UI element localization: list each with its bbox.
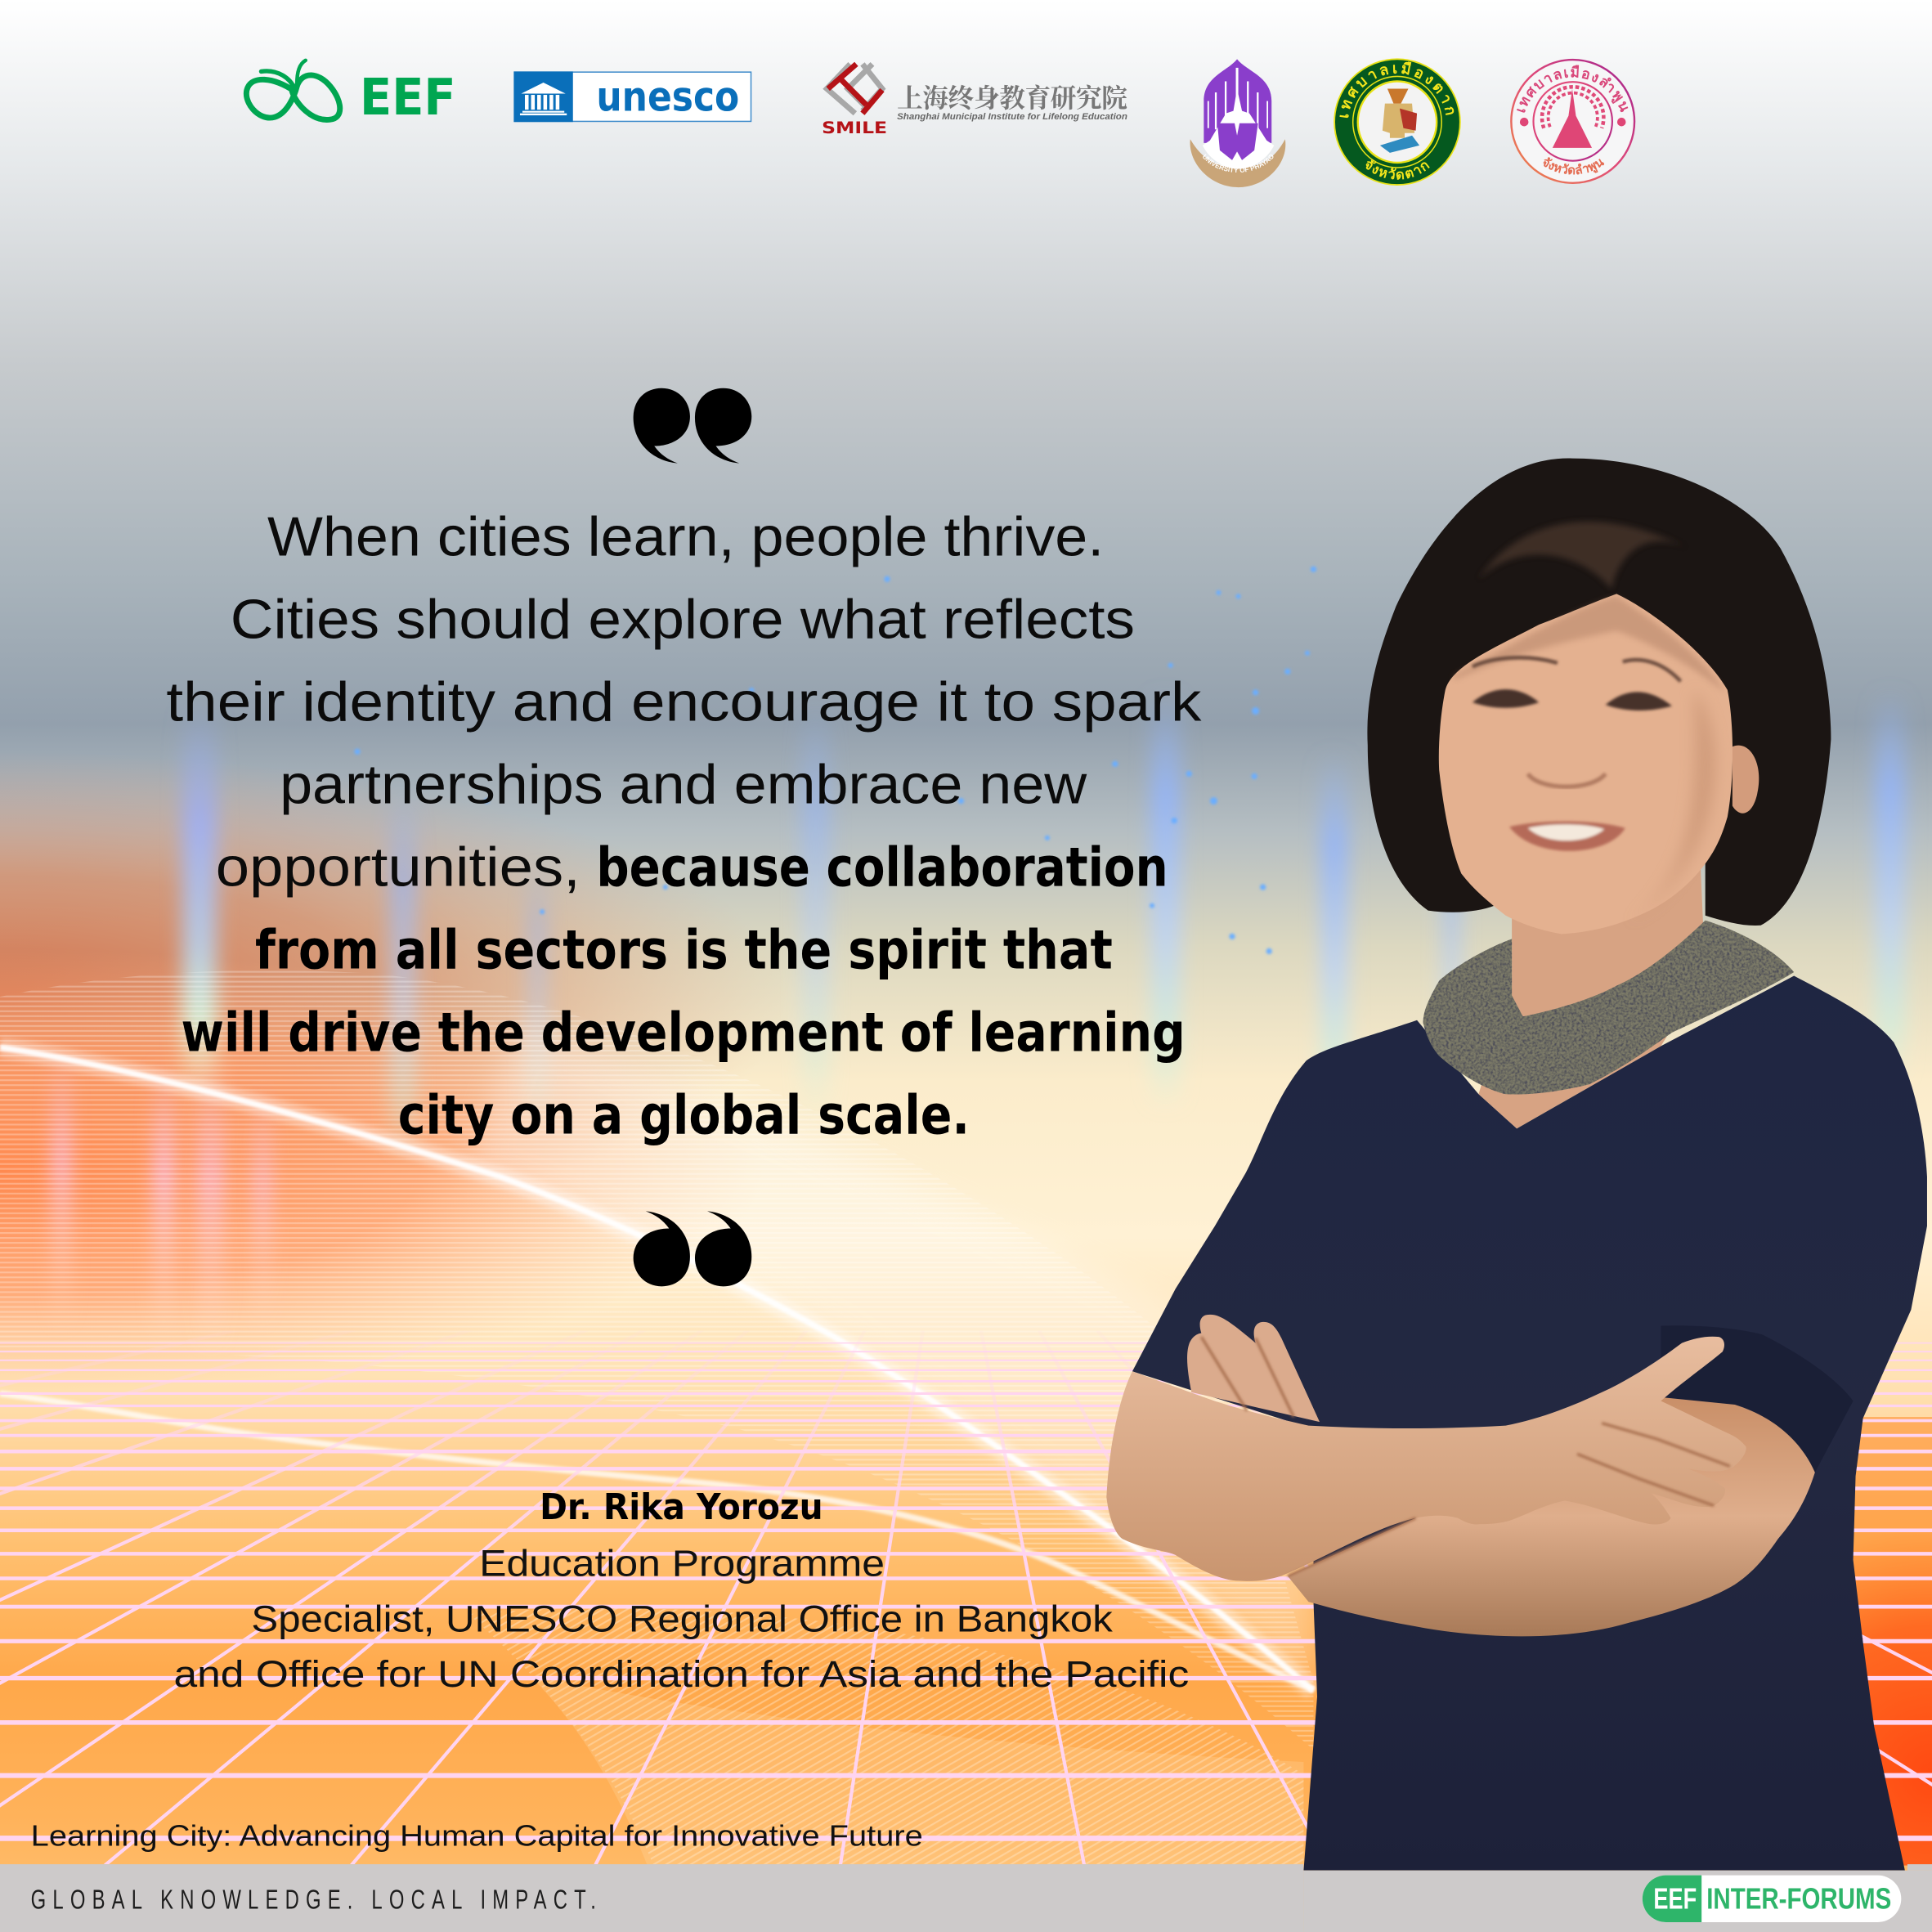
quote text: their identity and encourage it to spark xyxy=(166,672,1201,733)
badge: EEF Inter-Forums xyxy=(1643,1876,1901,1922)
logo: EEF: EEF xyxy=(360,68,456,127)
fingers under arm xyxy=(1187,1315,1320,1422)
arm right lower xyxy=(1288,1397,1815,1636)
person portrait xyxy=(1106,459,1927,1871)
scarf xyxy=(1423,921,1794,1094)
icon: closing quote mark xyxy=(634,1211,751,1286)
forehead shadow xyxy=(1454,596,1725,693)
icon: elephant xyxy=(1380,89,1419,153)
speaker attribution xyxy=(173,1486,1189,1695)
logo: UNESCO xyxy=(513,71,751,122)
badge: EEF Inter-Forums: INTER-FORUMS xyxy=(1706,1881,1891,1915)
speaker attribution: Specialist, UNESCO Regional Office in Bangkok xyxy=(251,1598,1113,1639)
logo: SMILE: 上海终身教育研究院 xyxy=(897,84,1127,113)
icon: temple xyxy=(520,83,567,115)
logo: Tak municipality seal: เทศบาลเมืองตาก xyxy=(1339,61,1454,118)
logo: UNESCO: unesco xyxy=(596,74,739,121)
quote text: opportunities, xyxy=(216,837,580,899)
quote text: partnerships and embrace new xyxy=(280,755,1087,816)
quote text: city on a global scale. xyxy=(398,1083,970,1146)
logo: Tak municipality seal xyxy=(1334,58,1461,186)
logo: SMILE: Shanghai Municipal Institute for Lifelong Education xyxy=(897,112,1127,122)
logo: University of Phayao crest xyxy=(1190,59,1285,188)
quote text: Cities should explore what reflects xyxy=(231,589,1135,651)
eyes xyxy=(1473,689,1672,710)
light streaks xyxy=(54,690,1905,1356)
logo: SMILE: SMILE xyxy=(822,119,887,137)
face shading xyxy=(1626,690,1715,924)
arm left and hand xyxy=(1106,1337,1746,1581)
sparkles xyxy=(354,567,1316,954)
mouth xyxy=(1509,822,1625,851)
perspective grid xyxy=(0,1334,1932,1864)
face xyxy=(1439,594,1733,934)
hair xyxy=(1367,459,1831,926)
hair highlight xyxy=(1478,522,1688,589)
ear xyxy=(1733,746,1759,814)
eyebrows xyxy=(1473,657,1681,681)
wave ribbons xyxy=(0,970,1316,1864)
shirt xyxy=(1132,976,1927,1871)
badge: EEF Inter-Forums: EEF xyxy=(1653,1881,1697,1915)
quote text: from all sectors is the spirit that xyxy=(255,918,1113,982)
speaker attribution: Dr. Rika Yorozu xyxy=(540,1486,823,1528)
logo: EEF xyxy=(246,61,456,127)
footer bar xyxy=(0,1864,1932,1932)
quote text xyxy=(166,507,1201,1146)
speaker attribution: and Office for UN Coordination for Asia and the Pacific xyxy=(173,1653,1189,1695)
nose xyxy=(1528,773,1606,787)
speaker attribution: Education Programme xyxy=(479,1542,885,1584)
icon: opening quote mark xyxy=(634,388,751,464)
quote text: because collaboration xyxy=(596,836,1168,899)
logo: University of Phayao crest: UNIVERSITY OF PHAYAO xyxy=(1203,154,1274,173)
logo: Lamphun municipality seal: เทศบาลเมืองลำพูน xyxy=(1517,65,1629,113)
finger shadows xyxy=(1201,1337,1730,1576)
logo: Lamphun municipality seal xyxy=(1510,59,1635,184)
forum title: Learning City: Advancing Human Capital for Innovative Future xyxy=(31,1819,923,1853)
logo: Tak municipality seal: จังหวัดตาก xyxy=(1365,159,1430,180)
logo: SMILE xyxy=(822,64,1127,137)
neck xyxy=(1478,863,1706,1128)
logo: Lamphun municipality seal: จังหวัดลำพูน xyxy=(1544,157,1604,175)
sleeve seam xyxy=(1661,1325,1854,1473)
quote text: When cities learn, people thrive. xyxy=(267,507,1104,568)
quote text: will drive the development of learning xyxy=(182,1000,1186,1064)
tagline: GLOBAL KNOWLEDGE. LOCAL IMPACT. xyxy=(31,1885,596,1915)
